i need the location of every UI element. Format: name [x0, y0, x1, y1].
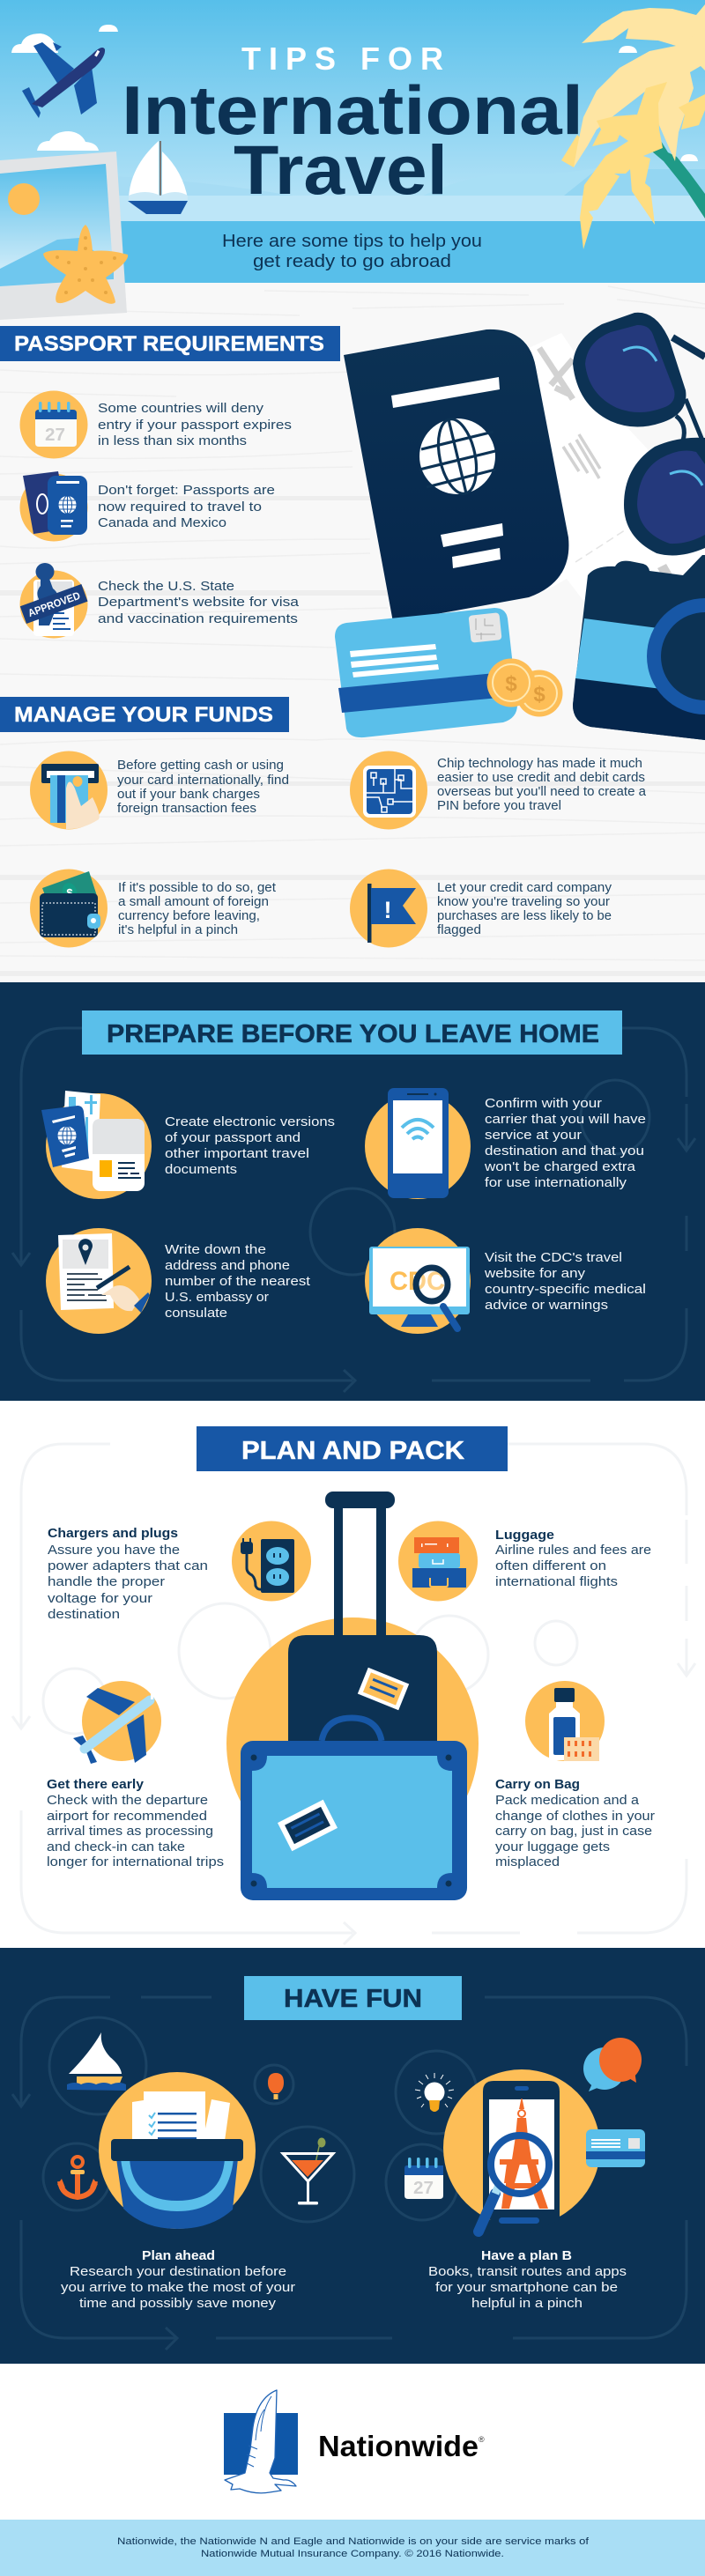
heading: passport requirements: [0, 326, 340, 361]
text: prepare tip 2: Confirm with your: [485, 1096, 602, 1111]
text: luggage: [495, 1529, 651, 1589]
text: funds tip 2: easier to use credit and debit cards: [437, 771, 645, 785]
text: have a plan b: for your smartphone can be: [435, 2280, 618, 2295]
text: funds tip 1: out if your bank charges: [117, 788, 260, 802]
sticker on suitcase: [278, 1800, 338, 1851]
logo: nationwide: Nationwide: [318, 2430, 479, 2462]
icon: approved visa: APPROVED: [26, 589, 82, 619]
text: prepare tip 1: Create electronic versions: [165, 1114, 335, 1129]
heading: manage your funds: MANAGE YOUR FUNDS: [14, 703, 273, 727]
text: funds tip 1: Before getting cash or using: [117, 759, 284, 773]
text: funds tip 4: flagged: [437, 923, 481, 937]
heading: have fun: HAVE FUN: [284, 1985, 422, 2013]
icon: medication: [525, 1681, 605, 1761]
text: funds tip 4: Let your credit card company: [437, 881, 612, 895]
text: prepare tip 4: website for any: [484, 1266, 586, 1281]
text: prepare tip 3: [165, 1242, 311, 1321]
icon: flag: [350, 869, 427, 948]
text: luggage: Airline rules and fees are: [495, 1543, 651, 1558]
text: prepare tip 3: consulate: [165, 1306, 227, 1321]
icon: boat: [67, 2032, 126, 2091]
subtitle: [222, 231, 482, 271]
text: passport tip 1: in less than six months: [98, 434, 247, 448]
icon: airplane: [22, 42, 105, 118]
text: chargers and plugs: handle the proper: [48, 1575, 165, 1589]
icon: small calendar: [404, 2158, 443, 2199]
panel: plan and pack: [0, 1401, 705, 1948]
heading: plan and pack: [197, 1426, 508, 1471]
text: plan ahead: time and possibly save money: [79, 2296, 277, 2311]
text: get there early: airport for recommended: [47, 1810, 207, 1824]
text: passport tip 3: [98, 580, 300, 626]
icon: plane: [73, 1681, 161, 1764]
hero sky and sea background: [0, 0, 705, 283]
text: carry on bag: misplaced: [495, 1855, 560, 1869]
heading: prepare before you leave home: PREPARE BEFORE YOU LEAVE HOME: [107, 1020, 599, 1048]
text: carry on bag: your luggage gets: [495, 1840, 610, 1854]
icon: calendar: 27: [45, 426, 65, 445]
text: have a plan b: Have a plan B: [481, 2248, 572, 2263]
text: carry on bag: Carry on Bag: [495, 1778, 580, 1792]
text: funds tip 2: overseas but you'll need to create a: [437, 785, 647, 799]
text: prepare tip 2: [484, 1096, 646, 1190]
sticker on case: [358, 1668, 409, 1710]
title: Travel: Travel: [234, 130, 448, 209]
subtitle: get ready to go abroad: [253, 251, 451, 271]
subtitle: Here are some tips to help you: [222, 231, 482, 251]
text: passport tip 2: Don't forget: Passports are: [98, 484, 275, 498]
text: passport tip 3: Check the U.S. State: [98, 580, 234, 594]
text: passport tip 2: now required to travel to: [98, 500, 262, 514]
footer legal note: Nationwide Mutual Insurance Company. © 2016 Nationwide.: [201, 2549, 504, 2559]
text: prepare tip 2: destination and that you: [485, 1144, 644, 1158]
icon: passports: [19, 471, 88, 541]
icon: sailboat: [128, 141, 188, 214]
text: carry on bag: Pack medication and a: [495, 1794, 640, 1808]
icon: power outlet: [232, 1521, 311, 1602]
icon: small calendar: 27: [413, 2179, 434, 2198]
text: prepare tip 2: for use internationally: [485, 1175, 627, 1190]
heading: prepare before you leave home: [82, 1010, 622, 1055]
icon: anchor: [57, 2157, 98, 2197]
text: passport tip 3: Department's website for visa: [98, 596, 300, 610]
icon: luggage stack: [398, 1521, 478, 1602]
icon: CDC monitor: [365, 1228, 471, 1334]
icon: wallet: $: [66, 886, 73, 899]
text: plan ahead: you arrive to make the most of your: [61, 2280, 295, 2295]
text: passport tip 2: Canada and Mexico: [98, 516, 226, 530]
icon: sunglasses: [573, 313, 705, 555]
icon: smartphone: [365, 1088, 471, 1199]
icon: credit card and coins: [335, 608, 562, 737]
text: have a plan b: [428, 2248, 627, 2311]
text: carry on bag: [495, 1778, 655, 1869]
icon: speech bubbles: [583, 2038, 642, 2091]
icon: palm tree: [561, 4, 705, 249]
text: luggage: Luggage: [495, 1529, 554, 1543]
text: passport tip 1: [98, 402, 292, 448]
text: plan ahead: Research your destination before: [70, 2264, 286, 2279]
icon: suitcases: [226, 1492, 479, 1900]
text: funds tip 4: [437, 881, 612, 937]
text: prepare tip 4: advice or warnings: [485, 1298, 608, 1313]
text: prepare tip 2: carrier that you will have: [485, 1112, 646, 1127]
text: chargers and plugs: destination: [48, 1608, 120, 1622]
icon: phone with eiffel tower: [443, 2069, 600, 2233]
icon: coins: [486, 659, 562, 717]
logo: nationwide: [224, 2390, 485, 2493]
text: funds tip 3: a small amount of foreign: [118, 895, 269, 909]
travel map paper: [529, 333, 705, 602]
heading: passport requirements: PASSPORT REQUIREMENTS: [14, 332, 324, 356]
text: prepare tip 3: number of the nearest: [165, 1274, 311, 1289]
text: passport tip 3: and vaccination requirements: [98, 612, 298, 626]
text: prepare tip 3: address and phone: [165, 1258, 290, 1273]
text: plan ahead: [61, 2248, 295, 2311]
icon: large passport: [344, 329, 568, 622]
text: have a plan b: helpful in a pinch: [471, 2296, 583, 2311]
polaroid photo with starfish: [0, 152, 128, 320]
icon: globe: [419, 416, 495, 497]
text: prepare tip 4: country-specific medical: [485, 1282, 646, 1297]
text: funds tip 2: [437, 757, 647, 813]
text: prepare tip 2: won't be charged extra: [484, 1159, 636, 1174]
clouds: [11, 25, 698, 161]
icon: flag: !: [384, 897, 391, 923]
footer legal note: [0, 2520, 705, 2576]
text: prepare tip 4: [484, 1250, 646, 1313]
icon: small credit card: [586, 2129, 645, 2167]
text: funds tip 3: currency before leaving,: [118, 909, 260, 923]
text: funds tip 4: know you're traveling so your: [437, 895, 610, 909]
icon: CDC monitor: CDC: [390, 1267, 445, 1296]
text: prepare tip 1: other important travel: [165, 1146, 309, 1161]
text: funds tip 1: your card internationally, find: [117, 774, 289, 788]
panel: prepare before you leave home: [0, 982, 705, 1401]
text: funds tip 2: Chip technology has made it much: [437, 757, 642, 771]
text: get there early: longer for international trips: [47, 1855, 224, 1869]
text: funds tip 2: PIN before you travel: [437, 799, 561, 813]
text: luggage: often different on: [495, 1559, 606, 1573]
text: have a plan b: Books, transit routes and apps: [428, 2264, 627, 2279]
text: funds tip 1: [117, 759, 289, 816]
text: chargers and plugs: power adapters that can: [48, 1559, 208, 1573]
text: funds tip 1: foreign transaction fees: [117, 802, 256, 816]
text: carry on bag: change of clothes in your: [495, 1810, 655, 1824]
logo: nationwide: ®: [479, 2435, 485, 2444]
icon: chip: [350, 751, 427, 830]
text: funds tip 3: If it's possible to do so, get: [118, 881, 276, 895]
text: prepare tip 4: Visit the CDC's travel: [485, 1250, 622, 1265]
text: get there early: and check-in can take: [47, 1840, 185, 1854]
text: chargers and plugs: voltage for your: [48, 1592, 152, 1606]
text: get there early: Check with the departure: [47, 1794, 208, 1808]
text: chargers and plugs: Chargers and plugs: [48, 1527, 178, 1541]
icon: calendar: [19, 391, 88, 458]
text: prepare tip 3: Write down the: [165, 1242, 266, 1257]
icon: camera: [573, 555, 705, 740]
text: prepare tip 1: documents: [165, 1162, 237, 1177]
footer legal note: Nationwide, the Nationwide N and Eagle and Nationwide is on your side are service marks of: [117, 2536, 590, 2547]
text: get there early: [47, 1778, 224, 1869]
text: funds tip 4: purchases are less likely to be: [437, 909, 612, 923]
text: passport tip 1: Some countries will deny: [98, 402, 264, 416]
text: funds tip 3: [118, 881, 276, 937]
text: luggage: international flights: [495, 1575, 618, 1589]
icon: ATM card: [30, 751, 108, 830]
icon: travel documents: [41, 1091, 152, 1199]
title: International: International: [122, 71, 583, 149]
text: funds tip 3: it's helpful in a pinch: [118, 923, 238, 937]
panel: have fun: [0, 1948, 705, 2364]
text: passport tip 2: [98, 484, 275, 530]
heading: have fun: [244, 1976, 462, 2020]
icon: light bulb: [415, 2073, 454, 2112]
eiffel tower: [500, 2099, 548, 2209]
icon: approved visa: [19, 563, 88, 638]
text: prepare tip 3: U.S. embassy or: [165, 1290, 269, 1305]
heading: manage your funds: [0, 697, 289, 732]
title: tips for: TIPS FOR: [241, 41, 443, 77]
text: plan ahead: Plan ahead: [142, 2248, 215, 2263]
heading: plan and pack: PLAN AND PACK: [241, 1437, 464, 1465]
text: chargers and plugs: [48, 1527, 208, 1622]
text: prepare tip 1: [165, 1114, 335, 1177]
icon: coins: $: [505, 672, 517, 696]
text: get there early: Get there early: [47, 1778, 144, 1792]
icon: starfish: [43, 225, 128, 304]
icon: address note: [46, 1228, 152, 1334]
wood background: [0, 283, 705, 982]
text: carry on bag: carry on bag, just in case: [495, 1825, 652, 1839]
text: get there early: arrival times as processing: [47, 1825, 213, 1839]
text: passport tip 1: entry if your passport expires: [98, 418, 292, 433]
text: prepare tip 1: of your passport and: [165, 1130, 301, 1145]
text: prepare tip 2: service at your: [485, 1128, 582, 1143]
icon: wallet: [30, 869, 108, 948]
text: chargers and plugs: Assure you have the: [48, 1543, 180, 1558]
icon: coins: $: [533, 683, 545, 707]
icon: martini: [283, 2137, 333, 2204]
icon: hot air balloon: [268, 2073, 284, 2099]
icon: folder with checklist: [99, 2072, 256, 2229]
